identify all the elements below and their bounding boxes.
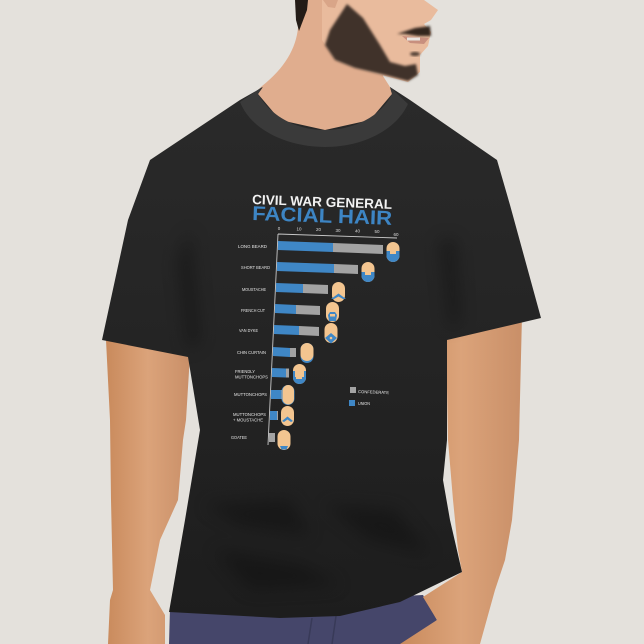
bars: confederate bbox=[269, 243, 383, 442]
axis tick labels: 60 bbox=[393, 232, 399, 237]
icon: chin curtain bbox=[300, 343, 314, 363]
axis tick labels: 10 bbox=[296, 226, 302, 232]
beard bbox=[325, 4, 418, 81]
row labels: FRIENDLY bbox=[235, 369, 255, 374]
icon: moustache bbox=[331, 282, 346, 302]
ear bbox=[323, 0, 338, 8]
jeans bbox=[169, 595, 437, 644]
bars: union bbox=[270, 241, 334, 420]
face icons bbox=[278, 242, 400, 450]
axis tick labels: 30 bbox=[335, 228, 341, 233]
row labels: GOATEE bbox=[231, 435, 247, 440]
left arm and hand bbox=[106, 340, 190, 644]
axis tick labels bbox=[278, 226, 399, 237]
row labels: SHORT BEARD bbox=[241, 265, 271, 270]
row labels: LONG BEARD bbox=[238, 244, 268, 249]
title line 2: FACIAL HAIR bbox=[252, 203, 393, 230]
legend bbox=[349, 387, 389, 406]
icon: muttonchops and moustache bbox=[281, 406, 294, 426]
icon: long beard bbox=[386, 242, 400, 262]
soul patch bbox=[410, 52, 420, 56]
row labels: VAN DYKE bbox=[239, 328, 258, 333]
icon: goatee bbox=[278, 430, 290, 450]
right arm and hand bbox=[400, 315, 522, 644]
shirt folds bbox=[178, 230, 460, 590]
axis tick labels: 40 bbox=[355, 228, 360, 234]
icon: french cut bbox=[326, 302, 339, 322]
row labels bbox=[231, 244, 271, 440]
title bbox=[252, 192, 393, 230]
row labels: MUTTONCHOPS bbox=[233, 412, 266, 417]
icon: friendly muttonchops bbox=[293, 364, 306, 384]
neck bbox=[256, 0, 394, 132]
axis tick labels: 50 bbox=[374, 229, 380, 234]
t-shirt body bbox=[102, 87, 541, 618]
icon: short beard bbox=[362, 262, 374, 282]
row labels: MUTTONCHOPS bbox=[235, 374, 268, 380]
hair bbox=[295, 0, 308, 31]
row labels: FRENCH CUT bbox=[241, 308, 265, 313]
collar ribbing bbox=[240, 87, 408, 147]
row labels: + MOUSTACHE bbox=[233, 418, 263, 422]
axes bbox=[268, 234, 397, 445]
row labels: MOUSTACHE bbox=[242, 287, 266, 292]
legend: confederate: CONFEDERATE bbox=[358, 389, 389, 395]
row labels: CHIN CURTAIN bbox=[237, 350, 266, 355]
face bbox=[322, 0, 438, 82]
infographic bbox=[231, 192, 400, 450]
icon: muttonchops bbox=[282, 385, 294, 405]
legend: union: UNION bbox=[358, 401, 370, 406]
title line 1: CIVIL WAR GENERAL bbox=[252, 192, 392, 212]
moustache and mouth bbox=[397, 26, 431, 44]
axis tick labels: 20 bbox=[316, 227, 321, 232]
icon: van dyke bbox=[324, 323, 338, 344]
row labels: MUTTONCHOPS bbox=[234, 392, 267, 397]
axis tick labels: 0 bbox=[278, 226, 281, 231]
